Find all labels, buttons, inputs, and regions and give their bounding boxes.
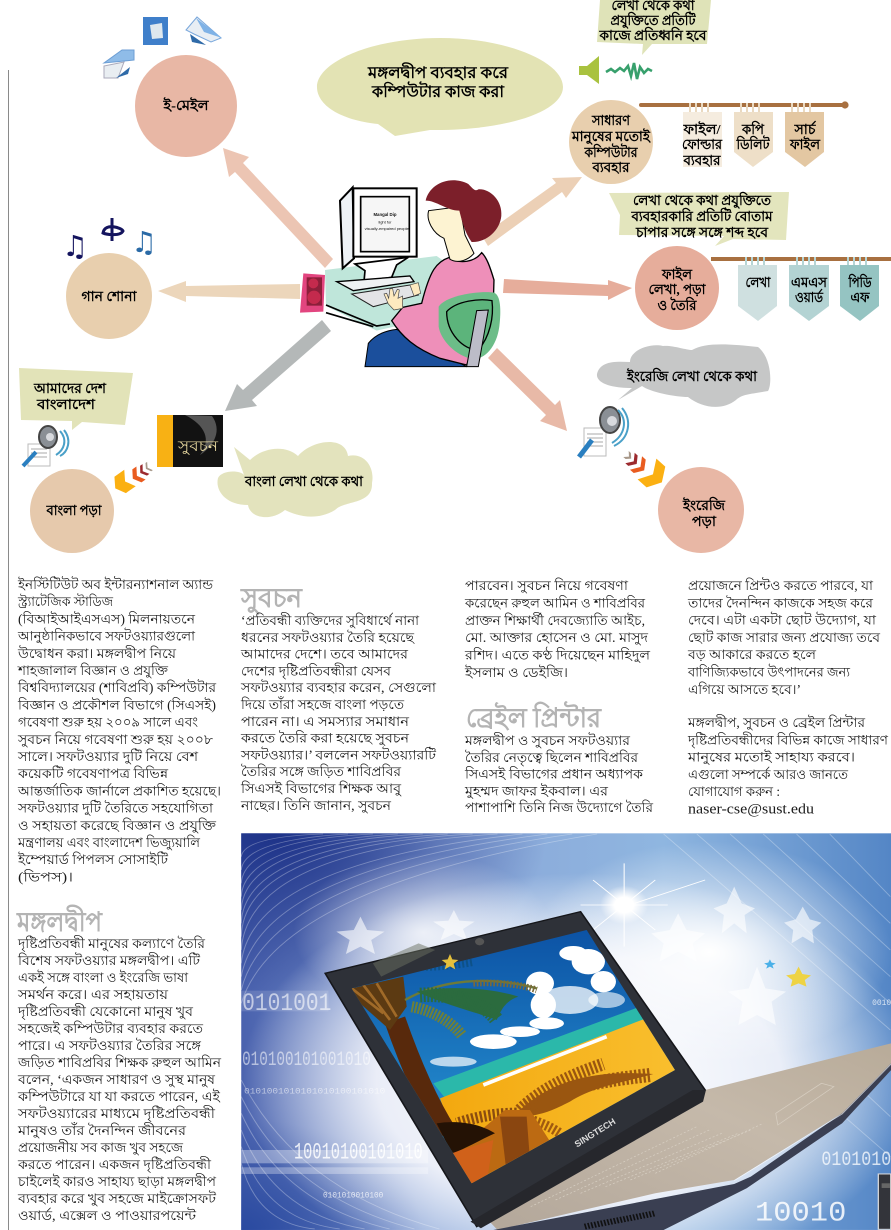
node: general computer use: সাধারণ [591, 114, 630, 129]
article: mangal dip text: সমর্থন করে। এর সহায়তায় [17, 986, 169, 1002]
flag: writing: লেখা [746, 276, 771, 291]
article: mangal dip text: পারে। এ সফটওয়্যার তৈরির সঙ্গে [18, 1037, 202, 1053]
article: braille printer text [464, 732, 654, 815]
article column 1: introduction: কয়েকটি গবেষণাপত্র বিভিন্ন [17, 765, 169, 781]
figure: person working at a computer [300, 180, 501, 367]
stars [336, 887, 821, 1025]
arrow: to general computer use [482, 177, 582, 246]
article: subachan text: পারেন না। এ সমস্যার সমাধান [241, 714, 410, 729]
node: listening to songs [66, 253, 152, 339]
article: closing paragraph and contact: মানুষের মতোই সাহায্য করবে। [687, 749, 855, 765]
icon: english speaker and document [579, 407, 628, 457]
article column 1: introduction: সালে। সফটওয়্যার দুটি নিয়ে বেশ [17, 748, 199, 765]
flare [581, 863, 705, 947]
callout: our country bangladesh: বাংলাদেশ [36, 398, 96, 413]
node: general computer use: ব্যবহার [592, 161, 631, 176]
diagram: arrows from user to tasks [158, 148, 632, 431]
icon: bangla speaker and document [23, 426, 68, 466]
article column 1: introduction: ও সহায়তা করেছে বিজ্ঞান ও প্রযুক্তি [18, 817, 217, 833]
article: braille printer text: মঙ্গলদ্বীপ ও সুবচন সফটওয়্যার [464, 732, 631, 749]
callout: text to speech on key press: ব্যবহারকারি প্রতিটি বোতাম [631, 207, 774, 225]
flag: file and folder: ফাইল/ [682, 120, 722, 138]
laptop lid [325, 912, 706, 1228]
node: english reading [658, 467, 744, 553]
article: closing paragraph and contact [687, 714, 889, 818]
heading: braille printer: ব্রেইল প্রিন্টার [466, 700, 602, 733]
cloud: english text to speech: ইংরেজি লেখা থেকে কথা [626, 367, 758, 385]
article column 3: subachan continued: ইসলাম ও ডেইজি। [464, 664, 568, 680]
article: closing paragraph and contact: naser-cse@sust.edu [688, 802, 815, 818]
article: closing paragraph and contact: যোগাযোগ করুন : [688, 784, 780, 799]
article: mangal dip text: দৃষ্টিপ্রতিবন্ধী মানুষের কল্যাণে তৈরি [17, 935, 206, 952]
node: writing files [635, 246, 719, 330]
article column 1: introduction [17, 576, 221, 884]
article: braille printer text: সিএসই বিভাগের প্রধান অধ্যাপক [464, 766, 644, 782]
flag: writing [738, 265, 777, 321]
binary digit bands: 010100101001010 [242, 1048, 371, 1071]
article: mangal dip text: দৃষ্টিপ্রতিবন্ধী যেকোনো মানুষ খুব [17, 1003, 193, 1020]
article column 1: introduction: (ভিপস)। [18, 868, 73, 884]
flag: file and folder [682, 112, 723, 169]
rail: file formats [711, 257, 891, 321]
speaker [300, 273, 325, 313]
arrow: to bangla reading [225, 320, 331, 411]
icon: music notes: ♫ [62, 229, 88, 263]
node: listening to songs: গান শোনা [82, 290, 137, 305]
image: subachan software cover [157, 415, 223, 467]
binary digit bands: 10010100101010 [294, 1139, 423, 1165]
article: mangal dip text: একই সঙ্গে বাংলা ও ইংরেজি ভাষা [18, 969, 189, 985]
binary digit bands: 0101001 [242, 989, 331, 1018]
article: braille printer text: তৈরির নেতৃত্বে ছিলেন শাবিপ্রবির [465, 749, 639, 766]
article: mangal dip text: মানুষও তাঁর দৈনন্দিন জীবনের [17, 1122, 187, 1138]
article column 1: introduction: শাহজালাল বিজ্ঞান ও প্রযুক্তি [17, 662, 169, 678]
callout: sound on every action: কাজে প্রতিধ্বনি হবে [599, 26, 708, 44]
article column 1: introduction: আনুষ্ঠানিকভাবে সফটওয়্যারগুলো [17, 628, 196, 644]
photo: laptop on a digital blue background [241, 833, 891, 1230]
monitor: light for [378, 219, 392, 224]
flag: copy delete: ডিলিট [736, 135, 771, 153]
article column 3: subachan continued [464, 577, 651, 680]
article: subachan text: নাছের। তিনি জানান, সুবচন [240, 797, 392, 813]
callout: text to speech on key press: চাপার সঙ্গে সঙ্গে শব্দ হবে [635, 226, 769, 241]
small desktop pc at edge [878, 1174, 891, 1229]
article: subachan text: ধরনের সফটওয়্যার তৈরি হয়েছে [241, 629, 416, 645]
article column 3: subachan continued: পারবেন। সুবচন নিয়ে গবেষণা [465, 577, 629, 594]
article column 1: introduction: ইম্পেয়ার্ড পিপলস সোসাইটি [17, 851, 169, 867]
palm shadow on sand [450, 1064, 653, 1185]
article column 3: subachan continued: মো. আক্তার হোসেন ও মো. মাসুদ [465, 630, 649, 646]
flag: ms word [789, 265, 829, 321]
article column 1: introduction: আন্তর্জাতিক জার্নালে প্রকাশিত হয়েছে। [17, 782, 221, 798]
article: mangal dip text: ব্যবহার করে খুব সহজে মাইক্রোসফট [17, 1190, 217, 1206]
flag: ms word: ওয়ার্ড [795, 288, 824, 306]
flag: ms word: এমএস [791, 276, 828, 291]
flag: pdf: পিডি [848, 273, 872, 291]
article: subachan text: আমাদের দেশে। তবে আমাদের [240, 647, 409, 662]
article: subachan text [240, 612, 437, 813]
article: mangal dip text: বিশেষ সফটওয়্যার মঙ্গলদ্বীপ। এটি [17, 952, 201, 968]
flag: search file: সার্চ [793, 120, 817, 138]
laptop base [485, 1043, 891, 1230]
node: general computer use: কম্পিউটার [584, 143, 639, 161]
face and neck [428, 207, 474, 261]
heading: subachan: সুবচন [240, 583, 303, 615]
arrow: to e-mail [223, 148, 333, 268]
flag: pdf: এফ [850, 291, 870, 306]
flag: copy delete: কপি [741, 120, 764, 138]
binary digit bands [241, 989, 891, 1229]
callout: sound on every action: প্রযুক্তিতে প্রতিটি [610, 11, 697, 29]
flag: copy delete [734, 112, 773, 167]
callout: sound on every action [597, 0, 711, 55]
article: closing paragraph and contact: মঙ্গলদ্বীপ, সুবচন ও ব্রেইল প্রিন্টার [687, 714, 866, 731]
flag: pdf [840, 265, 879, 321]
callout: our country bangladesh: আমাদের দেশ [33, 382, 107, 397]
monitor: Mangal Dip [373, 212, 397, 217]
node: writing files: লেখা, পড়া [648, 283, 706, 298]
chair [439, 292, 500, 367]
callout: text to speech on key press: লেখা থেকে কথা প্রযুক্তিতে [633, 191, 771, 209]
node: writing files: ফাইল [661, 265, 693, 283]
article column 1: introduction: গবেষণা শুরু হয় ২০০৯ সালে এবং [18, 715, 198, 730]
photo background [241, 833, 891, 1230]
arrow: to music [158, 281, 300, 302]
article column 1: introduction: মন্ত্রণালয় এবং বাংলাদেশ ভিজ্যুয়ালি [17, 834, 201, 851]
palm tree [352, 960, 537, 1153]
bubble: main heading: মঙ্গলদ্বীপ ব্যবহার করে [367, 62, 509, 82]
article: subachan text: দেশের দৃষ্টিপ্রতিবন্ধীরা যেসব [241, 662, 391, 679]
article: mangal dip text: করতে পারেন। একজন দৃষ্টিপ্রতিবন্ধী [17, 1156, 212, 1173]
article: braille printer text: মুহম্মদ জাফর ইকবাল। এর [464, 782, 609, 799]
cloud: bangla text to speech [217, 442, 373, 517]
article: mangal dip text: জড়িত শাবিপ্রবির শিক্ষক রুহুল আমিন [17, 1054, 222, 1070]
flag: search file [785, 112, 824, 167]
article: closing paragraph and contact: এগুলো সম্পর্কে আরও জানতে [688, 766, 849, 782]
icon: music notes: ♫ [131, 225, 157, 259]
article: mangal dip text [17, 935, 222, 1223]
callout: our country bangladesh [19, 368, 133, 430]
flag: file and folder: ফোল্ডার [682, 138, 723, 153]
pants [365, 329, 467, 367]
monitor: visually-empaired people [365, 226, 409, 231]
cloud: english text to speech [597, 344, 770, 407]
article column 1: introduction: (বিআইআইএসএস) মিলনায়তনে [18, 610, 196, 626]
icon: music notes [62, 218, 157, 263]
node: bangla reading [30, 469, 114, 553]
callout: text to speech on key press [609, 191, 789, 246]
article column 4: braille printer continued: প্রয়োজনে প্রিন্টও করতে পারবে, যা [688, 577, 874, 593]
article: closing paragraph and contact: দৃষ্টিপ্রতিবন্ধীদের বিভিন্ন কাজে সাধারণ [687, 731, 889, 748]
bubble: main heading: কম্পিউটার কাজ করা [371, 81, 505, 101]
article: subachan text: সিএসই বিভাগের শিক্ষক আবু [240, 780, 402, 797]
article: subachan text: করতে তৈরি করা হয়েছে সুবচন [240, 730, 410, 746]
article column 3: subachan continued: প্রাক্তন শিক্ষার্থী দেবজ্যোতি আইচ, [465, 612, 645, 628]
keyboard [352, 285, 418, 307]
hair [426, 180, 501, 242]
article: mangal dip text: সহজেই কম্পিউটার ব্যবহার করতে [17, 1020, 204, 1036]
gold star reflection on bezel [442, 954, 458, 969]
flag: file and folder: ব্যবহার [683, 154, 722, 169]
node: bangla reading: বাংলা পড়া [46, 504, 102, 519]
node: english reading: পড়া [692, 515, 717, 530]
heading: mangal dip: মঙ্গলদ্বীপ [16, 904, 103, 937]
article column 1: introduction: স্ট্র্যাটেজিক স্টাডিজ [17, 593, 114, 609]
article column 1: introduction: ইনস্টিটিউট অব ইন্টারন্যাশনাল অ্যান্ড [17, 576, 214, 592]
article: subachan text: তৈরির সঙ্গে জড়িত শাবিপ্রবির [241, 763, 402, 779]
article: subachan text: সফটওয়্যার।’ বললেন সফটওয়্যারটি [240, 746, 437, 762]
article: mangal dip text: কম্পিউটারে যা যা করতে পারেন, এই [17, 1088, 221, 1104]
brand name: SINGTECH [573, 1116, 617, 1149]
article: braille printer text: পাশাপাশি তিনি নিজ উদ্যোগে তৈরি [465, 799, 654, 815]
image: subachan software cover: সুবচন [177, 439, 219, 455]
monitor [337, 187, 417, 291]
chevrons: to bangla reading [110, 462, 153, 497]
arrow: to english reading [488, 348, 567, 431]
desk [325, 256, 457, 331]
article column 4: braille printer continued: ছোট কাজ সারার জন্য প্রযোজ্য তবে [688, 629, 880, 645]
flag: search file: ফাইল [789, 135, 821, 153]
article: mangal dip text: বলেন, ‘একজন সাধারণ ও সুস্থ মানুষ [17, 1072, 216, 1088]
article column 4: braille printer continued: বাণিজ্যিকভাবে উৎপাদনের জন্য [687, 664, 851, 680]
article: mangal dip text: চাইলেই কারও সাহায্য ছাড়া মঙ্গলদ্বীপ [17, 1173, 217, 1189]
torso and arm [392, 253, 494, 365]
node: e-mail: ই-মেইল [162, 96, 209, 114]
article: mangal dip text: সফটওয়্যারের মাধ্যমে দৃষ্টিপ্রতিবন্ধী [17, 1105, 216, 1122]
node: writing files: ও তৈরি [658, 296, 698, 314]
icon: mail folder and arrows [104, 17, 222, 78]
node: e-mail [135, 55, 237, 157]
article column 4: braille printer continued: তাদের দৈনন্দিন কাজকে সহজ করে [687, 594, 874, 610]
chevrons: to english reading [623, 451, 671, 493]
laptop screen: beach and palm [350, 928, 677, 1185]
coloured stars [764, 959, 811, 987]
article column 4: braille printer continued [687, 577, 880, 697]
article: subachan text: দিয়ে তাঁরা সহজে বাংলা পড়তে [240, 696, 405, 712]
binary digit bands: 0101010010100 [323, 1190, 383, 1200]
article column 1: introduction: বিশ্ববিদ্যালয়ের (শাবিপ্রবি) কম্পিউটার [17, 679, 217, 695]
binary digit bands: 10010 [755, 1198, 846, 1229]
article column 4: braille printer continued: বড় আকারে করতে হলে [687, 647, 817, 662]
hands [384, 289, 403, 310]
article column 1: introduction: সুবচন নিয়ে গবেষণা শুরু হয় ২০০৮ [17, 731, 213, 747]
icon: loudspeaker with sound wave [579, 56, 652, 84]
article column 1: introduction: বিজ্ঞান ও প্রকৌশল বিভাগে (সিএসই) [17, 696, 216, 712]
article: subachan text: সফটওয়্যার ব্যবহার করেন, সেগুলো [240, 679, 437, 695]
article column 3: subachan continued: রশিদ। এতে কণ্ঠ দিয়েছেন মাহিদুল [464, 647, 651, 663]
node: general computer use [569, 100, 653, 184]
article column 4: braille printer continued: দেবে। এটা একটা ছোট উদ্যোগ, যা [688, 612, 877, 628]
article: mangal dip text: ওয়ার্ড, এক্সেল ও পাওয়ারপয়েন্ট [18, 1207, 197, 1223]
article: subachan text: ‘প্রতিবন্ধী ব্যক্তিদের সুবিধার্থে নানা [241, 612, 420, 629]
rail: general use tasks [639, 101, 849, 169]
article column 1: introduction: সফটওয়্যার দুটি তৈরিতে সহযোগিতা [17, 800, 214, 816]
article column 4: braille printer continued: এগিয়ে আসতে হবে।’ [688, 681, 801, 697]
article column 3: subachan continued: করেছেন রুহুল আমিন ও শাবিপ্রবির [464, 594, 646, 610]
arrow: to file writing [503, 279, 632, 300]
article: mangal dip text: প্রয়োজনীয় সব কাজ খুব সহজে [18, 1139, 184, 1155]
binary digit bands: 0101001010101010100101010 [244, 1086, 385, 1096]
article column 1: introduction: উদ্বোধন করা। মঙ্গলদ্বীপ নিয়ে [17, 645, 177, 661]
left vertical rule [8, 70, 9, 1230]
node: english reading: ইংরেজি [682, 496, 725, 514]
bubble: main heading [317, 38, 563, 136]
cloud: bangla text to speech: বাংলা লেখা থেকে কথা [244, 475, 364, 490]
node: general computer use: মানুষের মতোই [571, 127, 652, 145]
